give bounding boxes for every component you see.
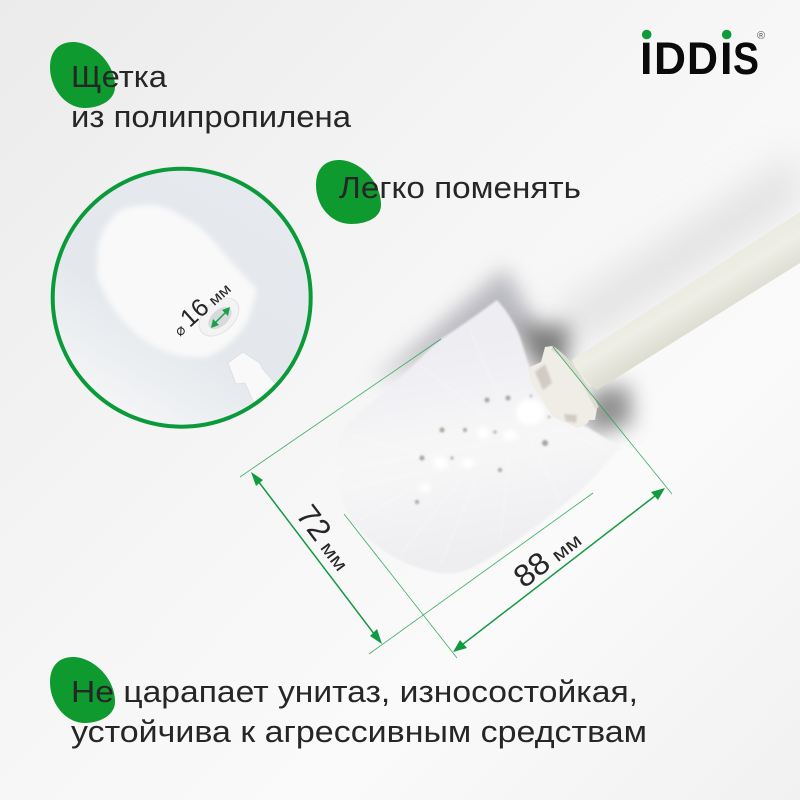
text block: properties: устойчива к агрессивным средствам (71, 714, 647, 749)
detail connector (228, 352, 276, 402)
handle (572, 212, 800, 390)
logo: IDDIS: D (654, 33, 686, 84)
icon: green blob 1 (50, 42, 115, 108)
bristles (337, 300, 620, 574)
heading: brush material (71, 59, 352, 134)
bristle rays (345, 330, 605, 565)
photo: toilet brush with handle (337, 150, 800, 574)
logo: IDDIS: ® (757, 30, 765, 42)
arrow: 72 mm (251, 472, 382, 644)
logo: IDDIS: D (687, 33, 718, 84)
label: 72 mm: мм (316, 538, 351, 576)
label: 16 mm (165, 274, 236, 341)
icon: green blob 3 (50, 657, 115, 723)
dimension lines (240, 339, 672, 658)
hole (204, 303, 236, 333)
icon: green blob 2 (316, 160, 381, 224)
arrow: diameter (211, 307, 230, 328)
heading: brush material: Щетка (71, 59, 168, 94)
panel: detail circle (53, 169, 311, 427)
detail brush head (97, 205, 257, 357)
logo: IDDIS: I (640, 33, 653, 84)
detail ring (192, 290, 246, 344)
arrow: 88 mm (453, 488, 665, 652)
heading: brush material: из полипропилена (71, 99, 352, 134)
logo: IDDIS: I (720, 33, 733, 84)
label: 88 mm: 88 (507, 545, 557, 595)
text block: properties (71, 674, 647, 749)
bristle core details (419, 399, 544, 492)
label: 72 mm (289, 498, 361, 577)
logo: IDDIS: S (733, 33, 759, 84)
label: 16 mm: 16 (175, 293, 214, 333)
label: 16 mm: мм (205, 280, 235, 309)
text block: properties: Не царапает унитаз, износостойкая, (71, 674, 638, 709)
collar (528, 346, 597, 428)
label: 88 mm: мм (548, 530, 586, 566)
heading: easy to change: Легко поменять (339, 170, 581, 205)
label: 16 mm: ⌀ (171, 321, 189, 340)
logo: IDDIS (640, 30, 765, 84)
label: 88 mm (507, 521, 587, 595)
label: 72 mm: 72 (289, 498, 338, 547)
